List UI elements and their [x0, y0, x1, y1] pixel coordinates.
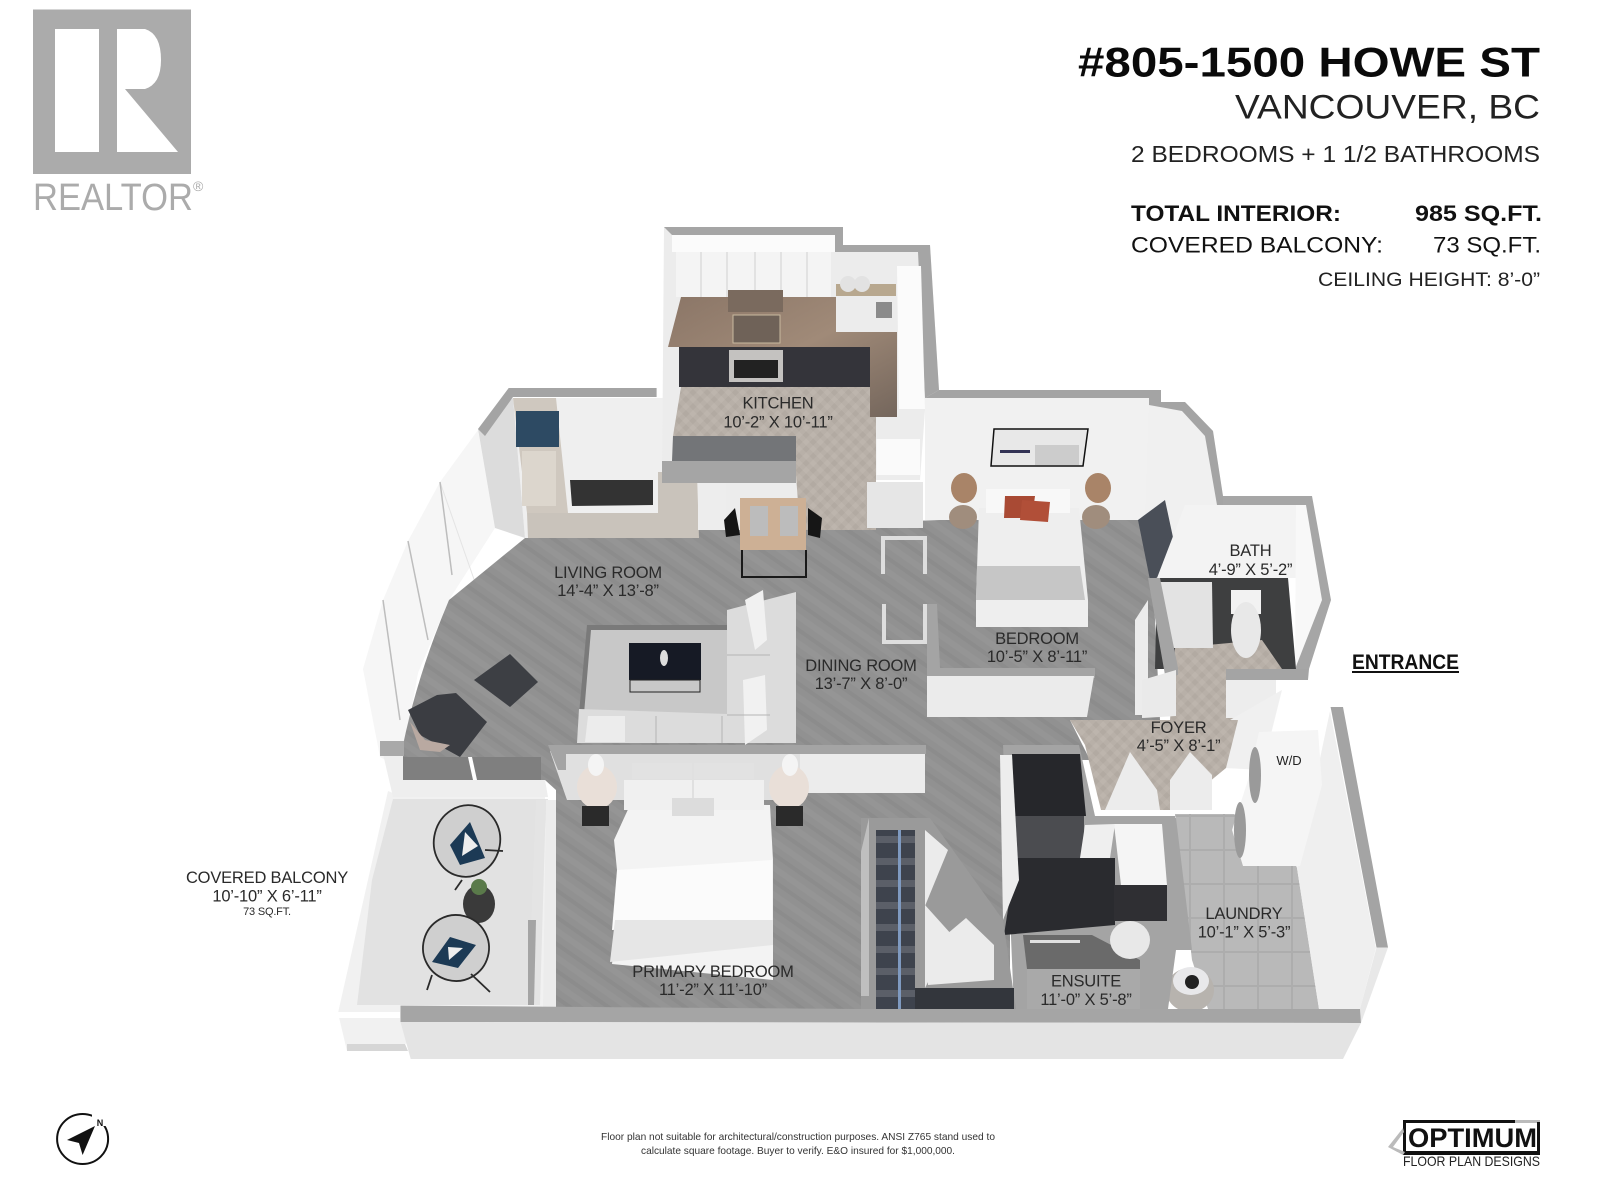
living room furniture: [408, 590, 796, 757]
ensuite label: 11’-0” X 5’-8”: [1040, 991, 1132, 1009]
kitchen label: [723, 395, 833, 432]
covered balcony area: [1131, 233, 1541, 258]
bedroom south wall: [927, 604, 1095, 717]
glass partition: [1023, 935, 1140, 969]
ensuite floor: [1027, 969, 1140, 1009]
bath walls: [1157, 505, 1310, 578]
backsplash: [728, 290, 783, 312]
bed: [610, 763, 773, 980]
marble floor: [1004, 858, 1115, 935]
chair: [416, 908, 496, 992]
nightstands with lamps: [577, 754, 809, 826]
north compass: [57, 1112, 108, 1164]
dining room label: [805, 657, 917, 693]
ensuite label: ENSUITE: [1051, 972, 1121, 990]
ensuite: [985, 745, 1176, 1009]
total interior: 985 SQ.FT.: [1415, 201, 1542, 226]
TV: [570, 480, 653, 506]
primary bedroom: [528, 745, 926, 1009]
bath dark walls: [1155, 578, 1296, 669]
closet and bath area: [1135, 390, 1331, 770]
covered balcony label: 73 SQ.FT.: [243, 906, 291, 918]
room labels: [186, 395, 1302, 1009]
bedrooms and bathrooms: 2 BEDROOMS + 1 1/2 BATHROOMS: [1131, 141, 1540, 167]
side table: [463, 879, 495, 923]
rug: [579, 625, 727, 714]
laundry label: LAUNDRY: [1205, 905, 1283, 923]
disclaimer: calculate square footage. Buyer to verify. E&O insured for $1,000,000.: [641, 1145, 955, 1157]
living room label: 14’-4” X 13’-8”: [557, 582, 659, 600]
vanity: [1160, 582, 1213, 648]
toilet: [1231, 590, 1261, 658]
address heading: #805-1500 HOWE ST: [1078, 38, 1540, 86]
countertop: [668, 297, 897, 417]
REALTOR logo: ®: [193, 178, 204, 194]
coffee table: [629, 643, 701, 692]
laundry: [1166, 707, 1388, 1023]
cooktop: [733, 315, 780, 343]
black marble shower: [1012, 754, 1086, 816]
bath floor: [1170, 640, 1282, 720]
primary bedroom label: PRIMARY BEDROOM: [632, 963, 794, 981]
washer dryer: [1232, 730, 1322, 866]
living room back walls: [478, 388, 699, 538]
REALTOR logo: REALTOR: [33, 177, 193, 219]
bath label: [1209, 542, 1292, 579]
ceiling height: CEILING HEIGHT: 8’-0”: [1318, 270, 1540, 291]
ottoman: [474, 654, 538, 707]
hanging clothes: [876, 830, 915, 1009]
disclaimer: [601, 1131, 995, 1157]
REALTOR logo: [33, 10, 204, 219]
shower glass door wall: [1000, 755, 1019, 920]
lower cabinets: [679, 347, 870, 387]
kitchen floor: [673, 387, 876, 530]
kitchen label: 10’-2” X 10’-11”: [723, 414, 833, 432]
dining table: [724, 498, 822, 577]
laundry label: [1198, 905, 1290, 942]
washer dryer label: W/D: [1276, 753, 1302, 768]
Optimum Floor Plan Designs logo: OPTIMUM: [1408, 1123, 1537, 1153]
total interior: [1131, 201, 1542, 226]
primary bedroom label: [632, 963, 794, 999]
oven: [729, 350, 783, 382]
entrance label: ENTRANCE: [1352, 651, 1459, 674]
disclaimer: Floor plan not suitable for architectural/construction purposes. ANSI Z765 stand used to: [601, 1131, 995, 1143]
bookshelf: [513, 398, 568, 513]
left wall: [528, 800, 556, 1009]
main floor: [403, 520, 1160, 1009]
primary bedroom label: 11’-2” X 11’-10”: [659, 981, 767, 999]
wall top: [548, 745, 926, 770]
foyer label: FOYER: [1151, 719, 1207, 737]
kitchen: [662, 227, 939, 530]
bedroom: [925, 390, 1161, 627]
armchair: [408, 693, 487, 757]
sectional sofa: [577, 590, 796, 745]
tall white cabinet: [897, 266, 925, 409]
headboard wall: [550, 751, 925, 800]
chair: [426, 798, 508, 890]
peninsula counter: [672, 436, 796, 461]
ensuite label: [1040, 972, 1132, 1009]
living room label: [554, 564, 662, 600]
upper cabinets: [676, 252, 831, 297]
balcony: [338, 791, 548, 1051]
side counter and shelf: [836, 266, 897, 332]
bed: [976, 489, 1088, 627]
door frames: [883, 538, 925, 642]
walk-in closet: [859, 818, 1016, 1009]
laundry label: 10’-1” X 5’-3”: [1198, 924, 1290, 942]
bath label: BATH: [1230, 542, 1271, 560]
bath label: 4’-9” X 5’-2”: [1209, 561, 1292, 579]
closet door walls: [1135, 600, 1155, 715]
city: VANCOUVER, BC: [1235, 89, 1540, 127]
covered balcony area: 73 SQ.FT.: [1433, 233, 1541, 258]
living to balcony wall: [380, 741, 548, 797]
covered balcony label: COVERED BALCONY: [186, 869, 348, 887]
round appliance: [1166, 967, 1214, 1012]
vanity: [1114, 824, 1167, 921]
south exterior wall: [400, 1006, 1361, 1059]
covered balcony area: COVERED BALCONY:: [1131, 233, 1383, 258]
curved living room windows: [363, 430, 495, 770]
door blocks: [876, 439, 920, 475]
lamps and nightstands: [949, 473, 1111, 529]
foyer label: 4’-5” X 8’-1”: [1137, 737, 1220, 755]
covered balcony label: [186, 869, 348, 918]
kitchen label: KITCHEN: [742, 395, 814, 413]
total interior: TOTAL INTERIOR:: [1131, 201, 1341, 226]
Optimum Floor Plan Designs logo: FLOOR PLAN DESIGNS: [1403, 1153, 1540, 1169]
Optimum Floor Plan Designs logo: [1388, 1120, 1540, 1169]
dining room label: DINING ROOM: [805, 657, 917, 675]
wall between ensuite and laundry: [1167, 818, 1192, 950]
closet doors: [925, 830, 948, 906]
dining room label: 13’-7” X 8’-0”: [815, 675, 907, 693]
covered balcony label: 10’-10” X 6’-11”: [212, 888, 322, 906]
title block: [1078, 38, 1542, 291]
bedroom label: 10’-5” X 8’-11”: [987, 648, 1087, 666]
toilet: [1110, 921, 1150, 959]
media console: [527, 472, 699, 538]
north compass: N: [97, 1118, 103, 1128]
foyer: [1070, 720, 1238, 810]
bedroom label: [987, 630, 1087, 666]
living room label: LIVING ROOM: [554, 564, 662, 582]
right wall: [1297, 711, 1376, 1009]
foyer label: [1137, 719, 1220, 755]
hanging clothes: [1138, 500, 1180, 580]
wall art: [991, 429, 1088, 466]
floor plan: [186, 227, 1388, 1059]
bedroom label: BEDROOM: [995, 630, 1079, 648]
